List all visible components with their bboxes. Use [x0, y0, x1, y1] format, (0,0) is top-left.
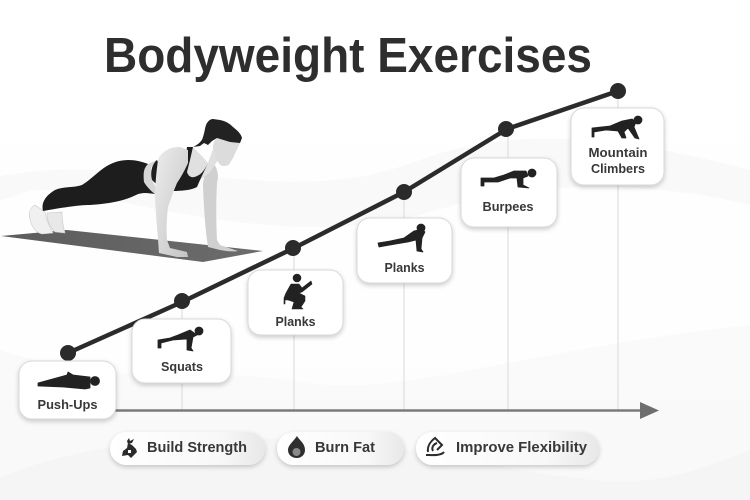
card: Planks (push-up pose): Planks — [384, 260, 424, 275]
benefit pill: Burn Fat — [277, 432, 404, 465]
leggings — [42, 160, 155, 211]
card: Mountain Climbers — [571, 108, 664, 185]
benefit pill: Improve Flexibility — [416, 432, 599, 465]
hair and ponytail — [193, 119, 242, 147]
card: Burpees — [461, 158, 557, 227]
shoes — [29, 205, 53, 234]
midriff — [143, 160, 158, 194]
timeline vertical guide lines — [182, 91, 618, 410]
sports bra — [151, 147, 208, 191]
icon: flexibility — [426, 438, 444, 455]
horizontal axis arrow — [110, 402, 659, 419]
benefit pill: Build Strength — [110, 432, 265, 465]
benefit pill: Build Strength: Build Strength — [147, 439, 247, 456]
progress line with markers — [60, 83, 626, 361]
icon: squat figure — [284, 274, 312, 309]
face — [213, 138, 240, 166]
icon: flame — [288, 436, 305, 458]
icon: high plank figure — [158, 327, 203, 351]
icon: mountain climber figure — [592, 116, 642, 139]
front arm and hand — [155, 147, 188, 257]
chest and neck — [180, 146, 218, 186]
card: Mountain Climbers: Climbers — [591, 161, 645, 176]
card: Squats — [132, 319, 231, 383]
card: Planks (push-up pose) — [357, 218, 452, 283]
icon: push-up figure — [378, 224, 425, 252]
card: Push-Ups — [19, 361, 116, 419]
icon: strength — [122, 438, 137, 458]
title: Bodyweight Exercises — [104, 29, 592, 83]
icon: push-up figure lying — [38, 372, 100, 389]
card: Burpees: Burpees — [482, 199, 534, 214]
yoga mat — [1, 230, 263, 262]
card: Planks (squat pose) — [248, 270, 343, 335]
card: Planks (squat pose): Planks — [276, 314, 316, 329]
woman doing plank on mat — [1, 119, 263, 262]
benefit pill: Improve Flexibility: Improve Flexibility — [456, 439, 588, 456]
card: Push-Ups: Push-Ups — [38, 397, 98, 412]
icon: low plank figure — [481, 169, 536, 188]
card: Mountain Climbers: Mountain — [588, 145, 648, 160]
card: Squats: Squats — [161, 359, 203, 374]
benefit pill: Burn Fat: Burn Fat — [315, 439, 375, 456]
back arm and hand — [203, 162, 238, 251]
